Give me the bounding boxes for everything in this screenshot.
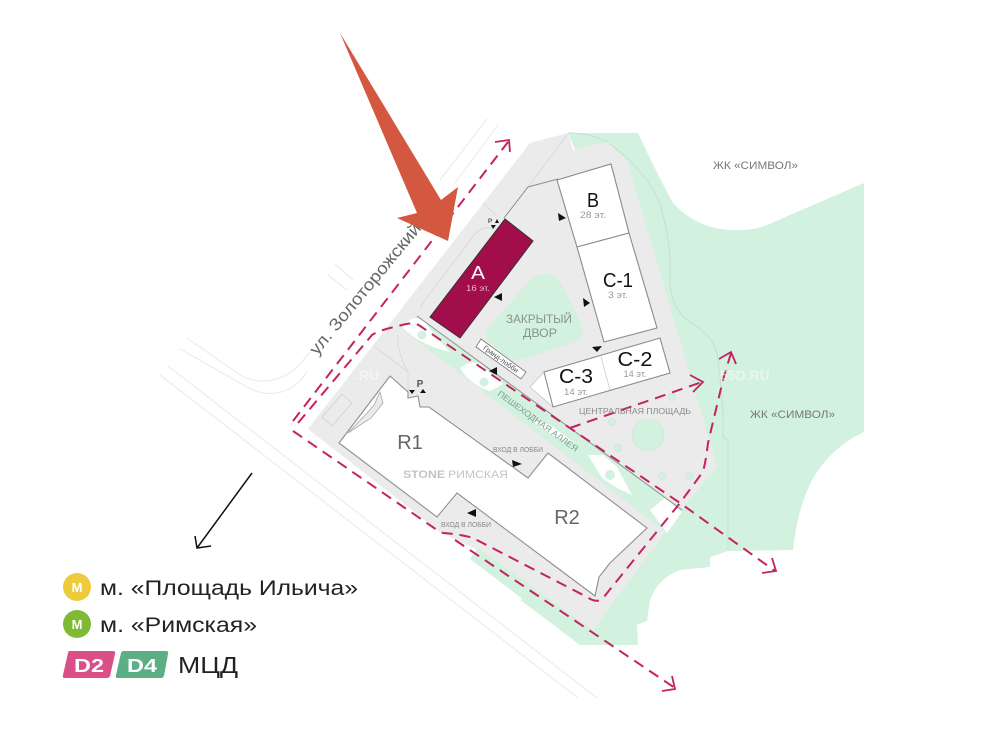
site inner lines (374, 135, 567, 392)
pedestrian alley (403, 316, 682, 533)
green strip along the south edge (470, 548, 607, 645)
pedestrian alley label: ПЕШЕХОДНАЯ АЛЛЕЯ (496, 389, 580, 454)
arrowhead: south-east route (662, 676, 675, 691)
MCD label: МЦД (178, 652, 238, 678)
dashed route: branch to central plaza (570, 382, 702, 428)
project logo (403, 469, 508, 481)
courtyard label line 2: ДВОР (523, 328, 557, 340)
label C-3: C-3 (559, 366, 593, 388)
central plaza label: ЦЕНТРАЛЬНАЯ ПЛОЩАДЬ (579, 406, 691, 416)
label C-2 floors: 14 эт. (624, 369, 646, 380)
MCD D2 badge: D2 (74, 656, 104, 676)
arrowhead: alley route (762, 558, 776, 573)
metro icon green: М (72, 617, 82, 632)
alley green strip (403, 316, 682, 533)
alley white lens 1 (403, 318, 450, 352)
label A floors: 16 эт. (466, 283, 490, 293)
metro icon yellow (63, 573, 91, 601)
closed courtyard green (486, 274, 582, 360)
neighbouring complex top: ЖК «СИМВОЛ» (713, 160, 798, 172)
alley white lens 4 (588, 455, 632, 495)
big red pointer arrow (340, 33, 458, 241)
legend (63, 573, 358, 678)
arrowhead: street route (495, 140, 510, 152)
MCD D2 badge (63, 651, 115, 678)
parking labels (417, 218, 493, 390)
label R1: R1 (397, 432, 423, 454)
watermark fragments (355, 367, 770, 383)
roads: street outlines (160, 119, 597, 698)
metro icon yellow: М (72, 580, 82, 595)
arrowhead: plaza route (690, 375, 703, 392)
block lines around courtyard (417, 179, 682, 510)
watermark fragments: 55D.RU (720, 367, 770, 383)
label C-1: C-1 (603, 270, 633, 292)
building B (557, 164, 629, 247)
label A: A (471, 263, 485, 283)
label B floors: 28 эт. (580, 210, 606, 221)
street name: ул. Золоторожский (305, 219, 425, 359)
building C-1 (577, 233, 657, 342)
dashed route: south-east exit (455, 540, 675, 688)
lobby entrance label upper: ВХОД В ЛОББИ (493, 447, 543, 454)
green landscape: residential area (520, 133, 864, 645)
MCD D4 badge: D4 (127, 656, 157, 676)
label C-3 floors: 14 эт. (564, 387, 588, 398)
watermark fragments: .RU (355, 367, 379, 383)
dashed route: along street (293, 142, 508, 421)
buildings C-2 and C-3 (544, 338, 670, 407)
building labels (397, 160, 835, 529)
courtyard label: ЗАКРЫТЫЙ (506, 313, 572, 326)
building A highlighted (430, 219, 533, 338)
small black entrance triangles (409, 213, 602, 517)
small white triangle plot (530, 372, 553, 407)
alley dots (418, 330, 615, 480)
alley white end (650, 498, 682, 533)
green landscape: contour lines (568, 133, 728, 551)
label B: B (587, 190, 599, 212)
dashed route: south side to R2 corner and north-east (293, 353, 731, 601)
dashed route: pedestrian alley (298, 323, 775, 571)
site: grey paved ground (308, 133, 717, 630)
metro label Rimskaya: м. «Римская» (100, 614, 257, 637)
plaza green circles (608, 393, 693, 480)
project logo: STONE (403, 469, 445, 481)
label R2: R2 (554, 507, 580, 529)
grand lobby sign: Гранд-лобби (482, 344, 520, 375)
parking labels: P (488, 218, 493, 225)
thin black direction arrow (195, 473, 252, 548)
residential buildings R1 and R2 (339, 376, 647, 596)
metro label Ilyich Square: м. «Площадь Ильича» (100, 577, 358, 600)
parking square (322, 394, 352, 426)
arrowhead: north-east route (719, 352, 736, 364)
project logo: РИМСКАЯ (448, 469, 508, 481)
alley white lens 3 (528, 418, 575, 443)
label C-1 floors: 3 эт. (608, 290, 628, 301)
alley white lens 2 (460, 363, 503, 391)
R1 side annex (348, 392, 383, 433)
label C-2: C-2 (618, 349, 652, 371)
parking labels: P (417, 379, 424, 390)
neighbouring complex right: ЖК «СИМВОЛ» (750, 409, 835, 421)
MCD D4 badge (116, 651, 168, 678)
grand lobby sign (476, 339, 526, 379)
metro icon green (63, 610, 91, 638)
lobby entrance label lower: ВХОД В ЛОББИ (441, 522, 491, 529)
